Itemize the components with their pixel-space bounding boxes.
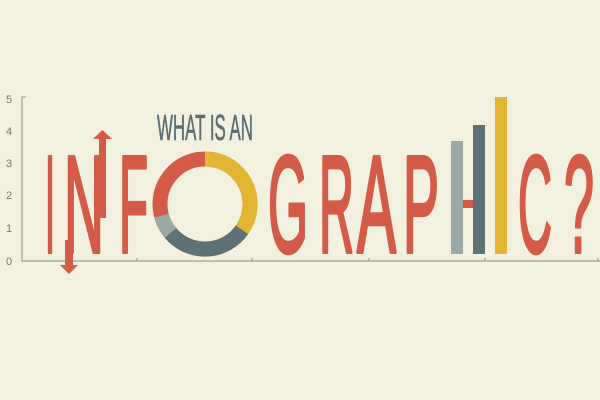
I bar yellow [495, 97, 507, 254]
arrow down [60, 240, 78, 274]
title letters: P [403, 128, 439, 282]
title letters: A [357, 128, 396, 282]
axis labels: 1 [6, 223, 12, 235]
title letters: G [268, 128, 308, 282]
axis labels: 0 [6, 256, 12, 268]
axis labels: 5 [6, 94, 12, 106]
title letters: F [119, 128, 148, 282]
arrow up [93, 130, 112, 218]
text: WHAT IS AN [157, 107, 253, 148]
axis labels [6, 94, 12, 268]
axis labels: 3 [6, 158, 12, 170]
axis labels: 2 [6, 190, 12, 202]
title letters [45, 128, 594, 282]
axis labels: 4 [6, 126, 12, 138]
title letters: N [64, 128, 104, 282]
donut O [160, 159, 250, 249]
title letters: R [319, 128, 354, 282]
H bars [451, 125, 485, 254]
title letters: I [45, 128, 55, 282]
chart axes [22, 97, 600, 261]
